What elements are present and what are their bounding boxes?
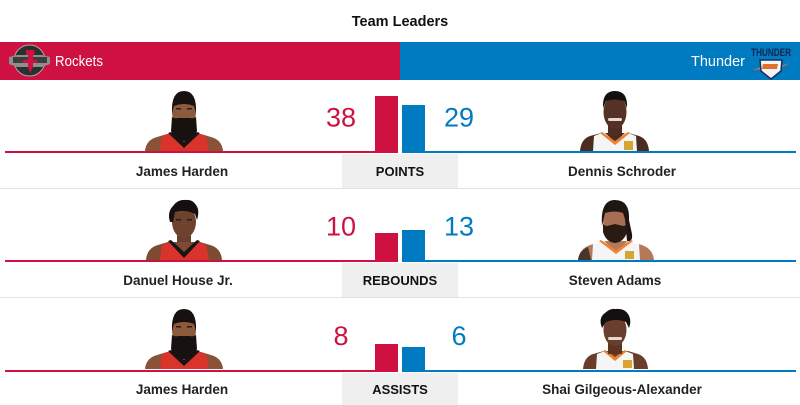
team name: Thunder: Thunder — [691, 54, 745, 70]
name: Dennis Schroder: Dennis Schroder — [568, 164, 677, 179]
panel: assists — [5, 309, 796, 405]
baseline: Thunder — [425, 151, 796, 153]
icon: Thunder logo — [751, 47, 791, 79]
name: Shai Gilgeous-Alexander: Shai Gilgeous-Alexander — [542, 382, 703, 397]
baseline: Thunder — [425, 370, 796, 372]
player: Danuel House Jr. — [146, 200, 222, 260]
header: Rockets — [0, 42, 400, 80]
stat label: rebounds — [342, 263, 458, 297]
bar: Thunder rebounds — [402, 230, 425, 262]
player: James Harden — [145, 309, 223, 369]
baseline: Rockets — [5, 260, 375, 262]
stat label: points: POINTS — [376, 164, 425, 179]
player: Dennis Schroder — [580, 91, 649, 151]
bar: Thunder assists — [402, 347, 425, 372]
icon: Rockets logo — [9, 45, 50, 76]
baseline: Thunder — [425, 260, 796, 262]
player: Shai Gilgeous-Alexander — [583, 309, 648, 369]
bar: Rockets rebounds — [375, 233, 398, 262]
title: Team Leaders — [352, 14, 448, 30]
stat label: assists: ASSISTS — [372, 382, 428, 397]
player: James Harden — [145, 91, 223, 151]
name: James Harden: James Harden — [136, 382, 228, 397]
team name: Rockets: Rockets — [55, 54, 103, 70]
name: Danuel House Jr.: Danuel House Jr. — [123, 273, 233, 288]
panel: rebounds — [5, 200, 796, 297]
bar: Rockets points — [375, 96, 398, 153]
header: Thunder — [400, 42, 800, 80]
name: Steven Adams: Steven Adams — [569, 273, 661, 288]
bar: Rockets assists — [375, 344, 398, 372]
value: 13: 13 — [444, 212, 474, 242]
value: 38: 38 — [326, 102, 356, 132]
value: 29: 29 — [444, 102, 474, 132]
value: 6: 6 — [451, 321, 467, 351]
stat label: rebounds: REBOUNDS — [363, 273, 438, 288]
panel: points — [5, 91, 796, 188]
value: 10: 10 — [326, 212, 356, 242]
value: 8: 8 — [333, 321, 349, 351]
name: James Harden: James Harden — [136, 164, 228, 179]
bar: Thunder points — [402, 105, 425, 153]
stat label: assists — [342, 373, 458, 405]
baseline: Rockets — [5, 151, 375, 153]
stat label: points — [342, 154, 458, 188]
baseline: Rockets — [5, 370, 375, 372]
player: Steven Adams — [578, 200, 654, 260]
